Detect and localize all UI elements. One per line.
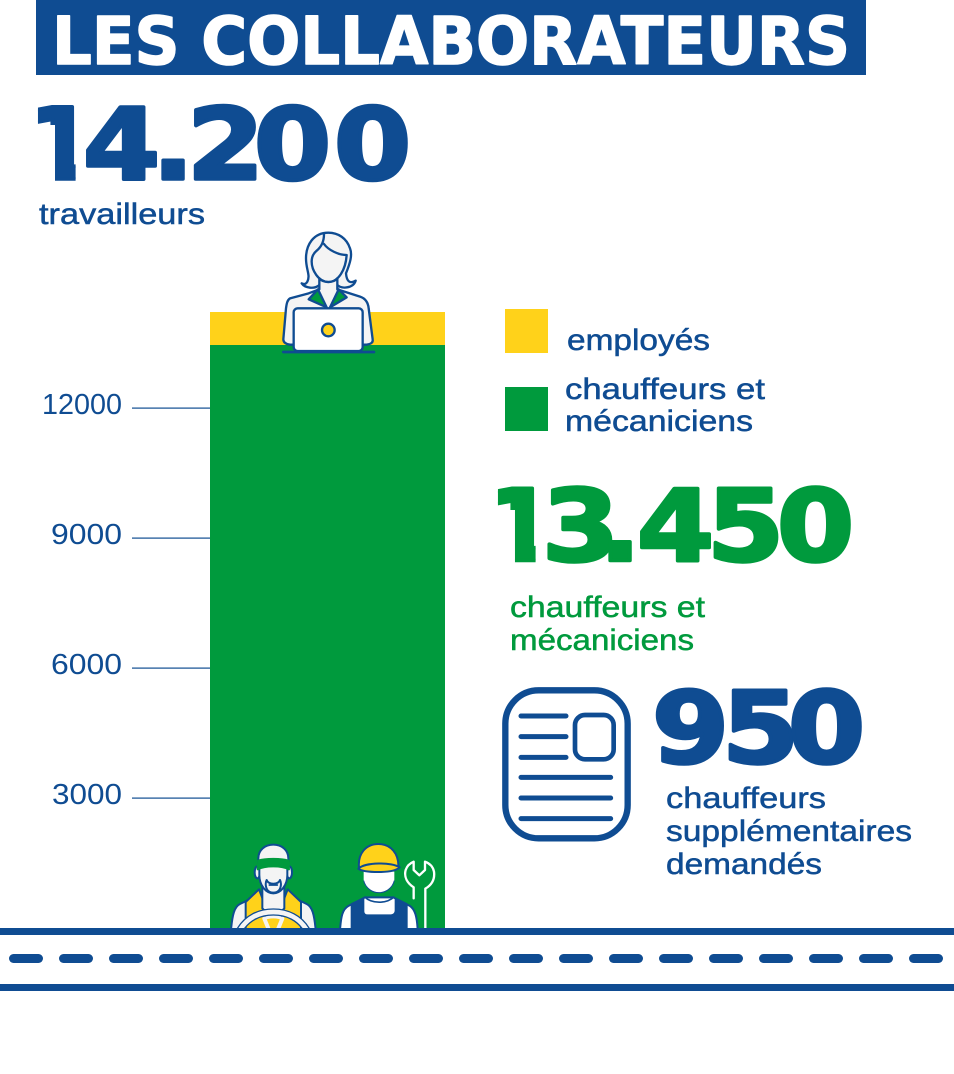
caption: additional drivers requested: demandés xyxy=(666,848,822,881)
total caption: travailleurs xyxy=(39,198,205,231)
figure: 13.450 xyxy=(498,485,851,564)
icon: truck driver at steering wheel xyxy=(231,845,316,932)
legend label: drivers and mechanics: chauffeurs et xyxy=(565,373,766,406)
title: LES COLLABORATEURS xyxy=(52,3,850,80)
legend xyxy=(505,309,766,438)
figure: 950: 950 xyxy=(652,670,865,786)
total figure: 14.200 xyxy=(38,104,408,182)
legend swatch: employees xyxy=(505,309,548,353)
axis labels and ticks: 12000 xyxy=(42,389,122,421)
axis labels and ticks: 3000 xyxy=(52,779,122,811)
legend label: drivers and mechanics: mécaniciens xyxy=(565,405,753,438)
stacked bar chart xyxy=(210,312,445,929)
road xyxy=(0,928,954,991)
bar segment: employees xyxy=(210,312,445,345)
axis labels and ticks xyxy=(42,389,210,811)
caption: additional drivers requested xyxy=(666,782,912,881)
caption: drivers and mechanics xyxy=(510,591,706,657)
axis labels and ticks: 9000 xyxy=(51,519,122,551)
legend label: employees: employés xyxy=(567,324,710,357)
axis labels and ticks: 6000 xyxy=(51,649,122,681)
icon: job application document xyxy=(505,690,628,838)
caption: drivers and mechanics: mécaniciens xyxy=(510,624,694,657)
icon: office employee with laptop xyxy=(283,233,374,352)
legend label: drivers and mechanics xyxy=(565,373,766,438)
caption: additional drivers requested: supplémentaires xyxy=(666,815,912,848)
icon: mechanic with wrench xyxy=(340,844,434,930)
figure: 13.450: 3.450 xyxy=(542,468,854,584)
legend swatch: drivers and mechanics xyxy=(505,387,548,431)
bar segment: drivers and mechanics xyxy=(210,345,445,929)
figure: 13.450: 1 xyxy=(481,468,558,584)
caption: additional drivers requested: chauffeurs xyxy=(666,782,826,815)
total figure: 14.200: 4.200 xyxy=(83,87,411,203)
total figure: 14.200: 1 xyxy=(21,87,98,203)
caption: drivers and mechanics: chauffeurs et xyxy=(510,591,706,624)
